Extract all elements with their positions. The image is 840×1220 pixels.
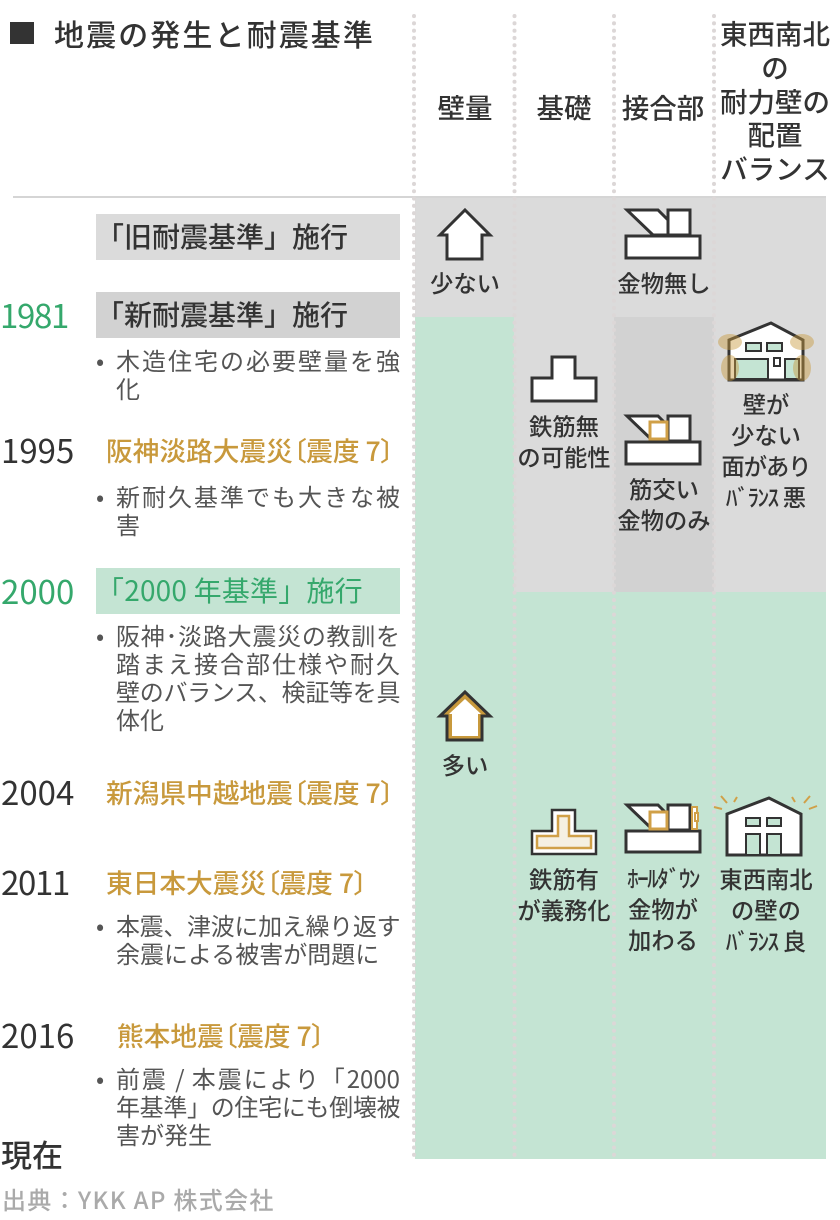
- year 2016: 2016: [1, 1010, 74, 1058]
- title: 地震の発生と耐震基準: [54, 11, 375, 55]
- band: 新耐震基準: 「新耐震基準」施行: [96, 294, 348, 334]
- event 2011: 東日本大震災〔震度 7〕: [106, 862, 367, 901]
- label: 少ない: 少ない: [430, 265, 500, 299]
- year 2004: 2004: [1, 767, 74, 815]
- note 2011: 本震、津波に加え繰り返す: [116, 907, 400, 942]
- year 1995: 1995: [1, 425, 74, 473]
- column heading: balance: 耐力壁の: [720, 80, 830, 120]
- note 2000: •: [96, 617, 104, 652]
- label: 東西南北の壁の: ﾊﾞﾗﾝｽ 良: [726, 923, 806, 957]
- note 2016: 前震 / 本震により「2000: [116, 1060, 400, 1095]
- note 2000: 体化: [116, 701, 164, 736]
- note 1981: [96, 342, 400, 405]
- source: 出典：YKK AP 株式会社: [2, 1181, 275, 1216]
- note 2000: 阪神･淡路大震災の教訓を: [116, 617, 400, 652]
- note 1995: 新耐久基準でも大きな被: [116, 478, 400, 513]
- label: 筋交い: [617, 471, 711, 536]
- note 2016: 年基準」の住宅にも倒壊被: [116, 1088, 400, 1123]
- column heading: balance: の: [761, 46, 789, 86]
- label: ホールダウン: 加わる: [628, 922, 698, 956]
- note 1981: •: [96, 342, 104, 377]
- year 1981: 1981: [0, 290, 68, 338]
- label: 壁が少ない面があり: 少ない: [731, 417, 801, 451]
- column heading: balance: バランス: [720, 147, 830, 187]
- year 2011: 2011: [1, 857, 69, 905]
- note 1981: 化: [116, 370, 140, 405]
- label: 鉄筋有: 鉄筋有: [529, 861, 599, 895]
- label: 鉄筋無: [517, 408, 611, 473]
- note 2000: [96, 617, 400, 736]
- note 2000: 踏まえ接合部仕様や耐久: [116, 645, 400, 680]
- label: 東西南北の壁の: 東西南北: [719, 861, 813, 895]
- column heading: 基礎: 基礎: [536, 86, 592, 126]
- label: 現在: 現在: [1, 1131, 63, 1176]
- note 1995: [96, 478, 400, 541]
- label: ホールダウン: 金物が: [628, 891, 698, 925]
- note 2011: •: [96, 907, 104, 942]
- note 1995: •: [96, 478, 104, 513]
- label: 金物無し: 金物無し: [617, 265, 711, 299]
- label: 鉄筋有: が義務化: [517, 892, 611, 926]
- label: ホールダウン: [627, 860, 700, 956]
- event 2016: 熊本地震〔震度 7〕: [117, 1015, 325, 1054]
- note 2016: •: [96, 1060, 104, 1095]
- column heading: 接合部: 接合部: [622, 86, 704, 126]
- note 2016: [96, 1060, 400, 1151]
- column heading: balance: 東西南北: [720, 12, 830, 52]
- label: 東西南北の壁の: の壁の: [731, 892, 801, 926]
- note 1981: 木造住宅の必要壁量を強: [116, 342, 400, 377]
- label: 多い: 多い: [442, 747, 488, 781]
- note 1995: 害: [116, 506, 140, 541]
- label: ホールダウン: ﾎｰﾙﾀﾞｳﾝ: [627, 860, 699, 894]
- label: 鉄筋無: 鉄筋無: [529, 408, 599, 442]
- label: 鉄筋無: の可能性: [517, 439, 611, 473]
- column heading: balance: [720, 12, 830, 187]
- band: 2000年基準: 「2000 年基準」施行: [96, 570, 363, 610]
- event 1995: 阪神淡路大震災〔震度 7〕: [106, 430, 394, 469]
- band: 旧耐震基準: 「旧耐震基準」施行: [96, 216, 348, 256]
- label: 壁が少ない面があり: ﾊﾞﾗﾝｽ 悪: [726, 479, 806, 513]
- label: 壁が少ない面があり: [721, 386, 811, 513]
- column heading: balance: 配置: [748, 113, 802, 153]
- label: 東西南北の壁の: [719, 861, 813, 957]
- note 2011: [96, 907, 400, 970]
- event 2004: 新潟県中越地震〔震度 7〕: [106, 772, 394, 811]
- column heading: 壁量: 壁量: [438, 86, 492, 126]
- label: 壁が少ない面があり: 壁が: [743, 386, 789, 420]
- note 2000: 壁のバランス、検証等を具: [116, 673, 400, 708]
- label: 筋交い: 金物のみ: [617, 502, 711, 536]
- label: 壁が少ない面があり: 面があり: [721, 448, 811, 482]
- year 2000: 2000: [1, 566, 74, 614]
- note 2016: 害が発生: [116, 1116, 212, 1151]
- label: 筋交い: 筋交い: [629, 471, 699, 505]
- label: 鉄筋有: [517, 861, 611, 926]
- note 2011: 余震による被害が問題に: [116, 935, 379, 970]
